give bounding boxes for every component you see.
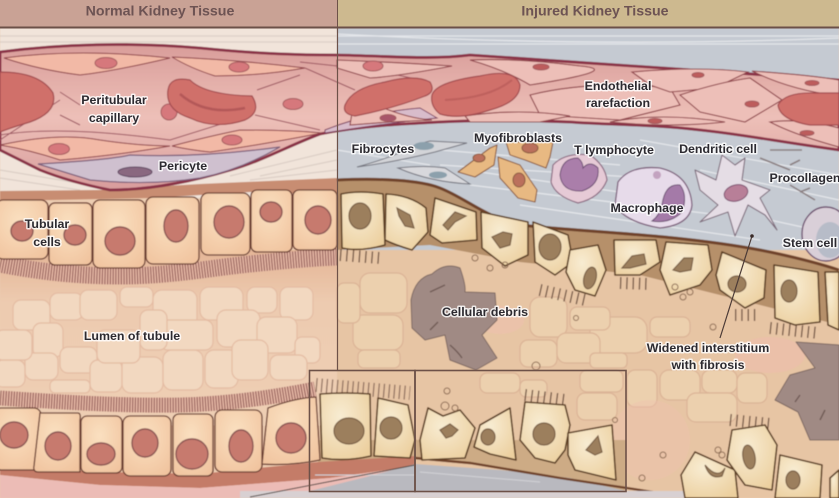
pink injury tint [735, 337, 805, 373]
header: injured kidney tissue [338, 0, 839, 27]
label: dendritic cell: Dendritic cell [679, 142, 757, 156]
lower membrane and wedge [0, 440, 700, 498]
pericyte [38, 147, 280, 183]
cellular debris, centre [411, 266, 497, 370]
lower tubular cells, normal [0, 397, 320, 476]
lower tubular cells, far right [681, 425, 839, 498]
header: injured kidney tissue: Injured Kidney Tissue [521, 4, 669, 20]
label: cells line: cells [33, 235, 61, 249]
label: macrophage: Macrophage [611, 201, 684, 215]
stem cell [802, 207, 839, 261]
header: normal kidney tissue [0, 0, 337, 27]
label: stem cell: Stem cell [783, 236, 837, 250]
fibrocytes [357, 141, 470, 184]
lumen cells, normal [0, 287, 320, 393]
label: myofibroblasts: Myofibroblasts [474, 131, 562, 145]
leader line: widened interstitium [720, 234, 754, 338]
label: endothelial rarefaction: Endothelial [585, 79, 651, 93]
boxed region outlines [310, 370, 626, 492]
dendritic cell [695, 155, 777, 236]
label: cellular debris: Cellular debris [442, 305, 528, 319]
label: widened interstitium: Widened interstitium [647, 341, 769, 355]
basement membrane: normal [0, 178, 337, 201]
cellular debris, right [775, 342, 839, 440]
procollagen [760, 150, 815, 200]
lumen cells, injured [337, 273, 767, 422]
panel: injured interstitium band [337, 179, 839, 325]
endothelial nuclei [48, 58, 819, 154]
red blood cells [0, 72, 839, 132]
basement membrane: injured [337, 179, 839, 270]
myofibroblasts [458, 142, 553, 202]
endothelial cells [0, 53, 839, 160]
brush border, normal [0, 257, 337, 276]
label: fibrocytes: Fibrocytes [352, 142, 414, 156]
lower tubular cells, boxed injury [320, 393, 616, 480]
label: lumen of tubule: Lumen of tubule [84, 329, 180, 343]
labels [25, 79, 839, 372]
top tubular cells, normal [0, 190, 337, 268]
macrophage [615, 168, 692, 228]
header rule [0, 26, 839, 28]
panel: lumen of tubule [0, 255, 818, 480]
label: with fibrosis: with fibrosis [671, 358, 745, 372]
panel: peritubular capillary [0, 45, 839, 190]
label: rarefaction line: rarefaction [586, 96, 650, 110]
label: pericyte: Pericyte [159, 159, 207, 173]
label: procollagen: Procollagen [770, 171, 839, 185]
brush border, injured [340, 255, 818, 424]
header: normal kidney tissue: Normal Kidney Tissue [86, 4, 234, 20]
T lymphocyte [551, 154, 607, 203]
debris granules [441, 255, 725, 481]
label: peritubular capillary: Peritubular [81, 93, 147, 107]
label: tubular cells: Tubular [25, 217, 69, 231]
top tubular cells, injured [341, 192, 839, 330]
label: capillary line: capillary [89, 111, 139, 125]
label: T lymphocyte: T lymphocyte [574, 143, 654, 157]
capillary lumen [0, 45, 839, 190]
divider between normal and injured [336, 0, 338, 370]
